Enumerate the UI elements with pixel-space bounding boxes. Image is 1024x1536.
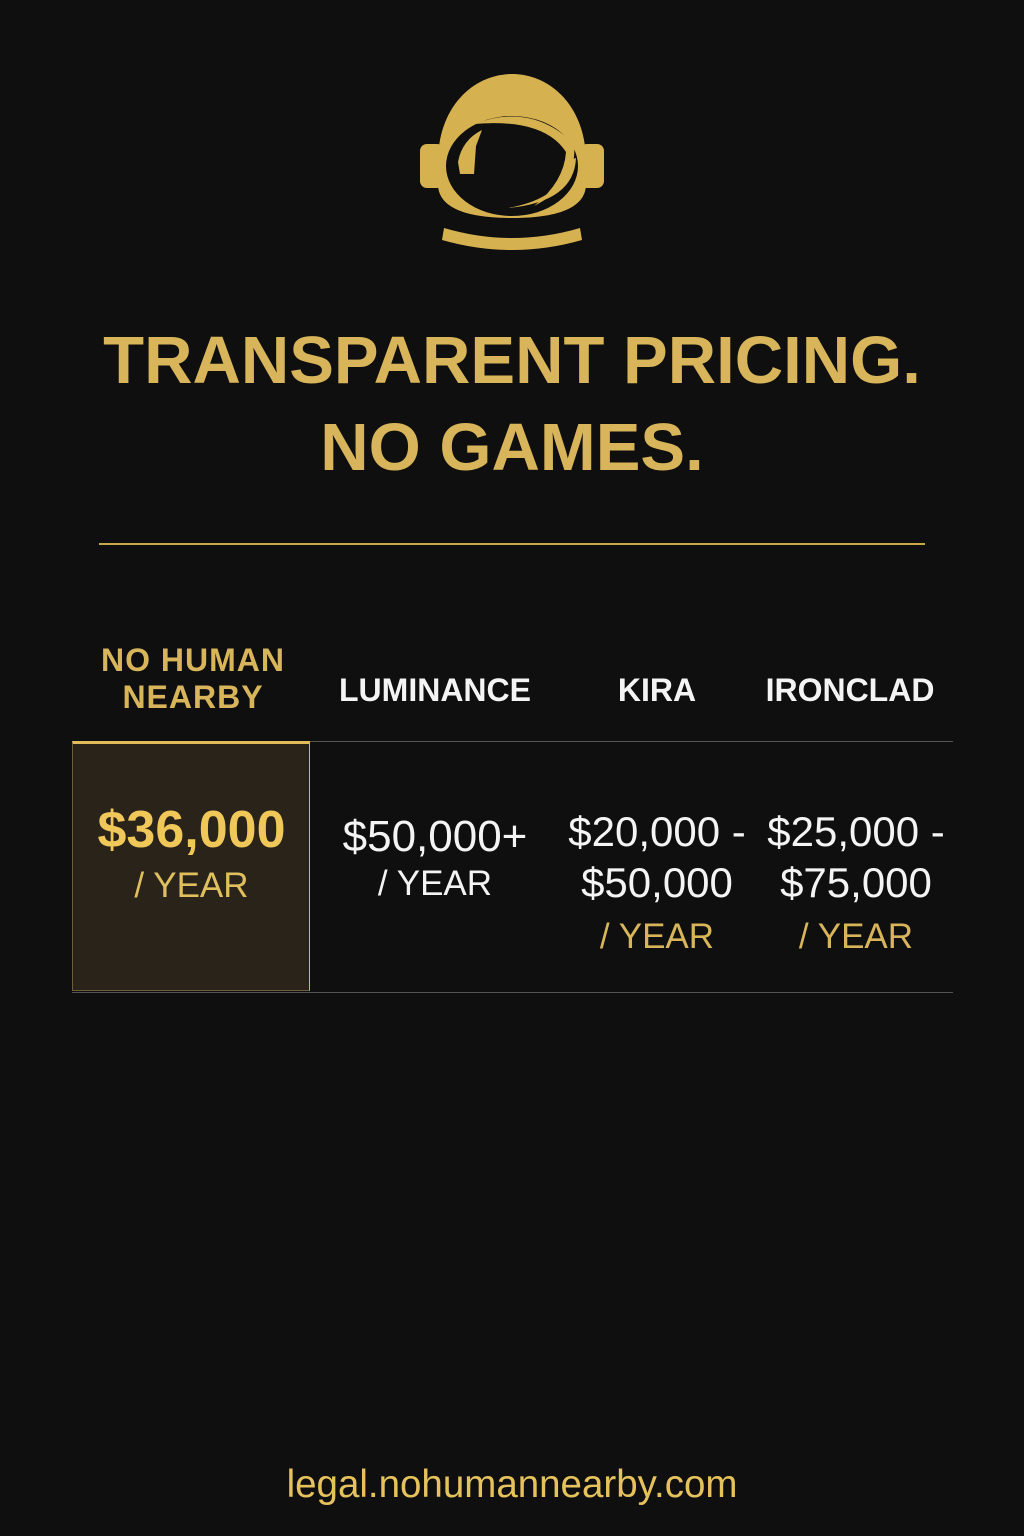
price: Ironclad [767, 808, 945, 956]
header: No Human Nearby: NEARBY [122, 679, 264, 715]
highlighted cell [72, 741, 310, 991]
header: Ironclad: IRONCLAD [766, 672, 934, 708]
table body [72, 741, 953, 993]
price: Kira [568, 808, 746, 956]
table header [101, 642, 934, 715]
price: Ironclad: $25,000 - [767, 808, 945, 855]
header: Kira: KIRA [618, 672, 696, 708]
highlighted cell: / YEAR [134, 866, 249, 905]
price: Luminance: $50,000+ [343, 812, 527, 861]
price: Luminance: / YEAR [378, 864, 492, 903]
highlighted cell: $36,000 [98, 801, 285, 859]
price: Kira: $50,000 [581, 859, 733, 906]
price: Ironclad: $75,000 [780, 859, 932, 906]
title: TRANSPARENT PRICING. [103, 323, 921, 398]
title [103, 323, 921, 485]
header: Luminance: LUMINANCE [339, 672, 531, 708]
price: Ironclad: / YEAR [799, 917, 913, 956]
price: Kira: / YEAR [600, 917, 714, 956]
price: Luminance [343, 812, 527, 903]
title: NO GAMES. [320, 410, 704, 485]
header: No Human Nearby [101, 642, 285, 715]
icon: astronaut helmet [420, 74, 604, 250]
footer url: legal.nohumannearby.com [287, 1463, 737, 1506]
price: Kira: $20,000 - [568, 808, 746, 855]
header: No Human Nearby: NO HUMAN [101, 642, 285, 678]
